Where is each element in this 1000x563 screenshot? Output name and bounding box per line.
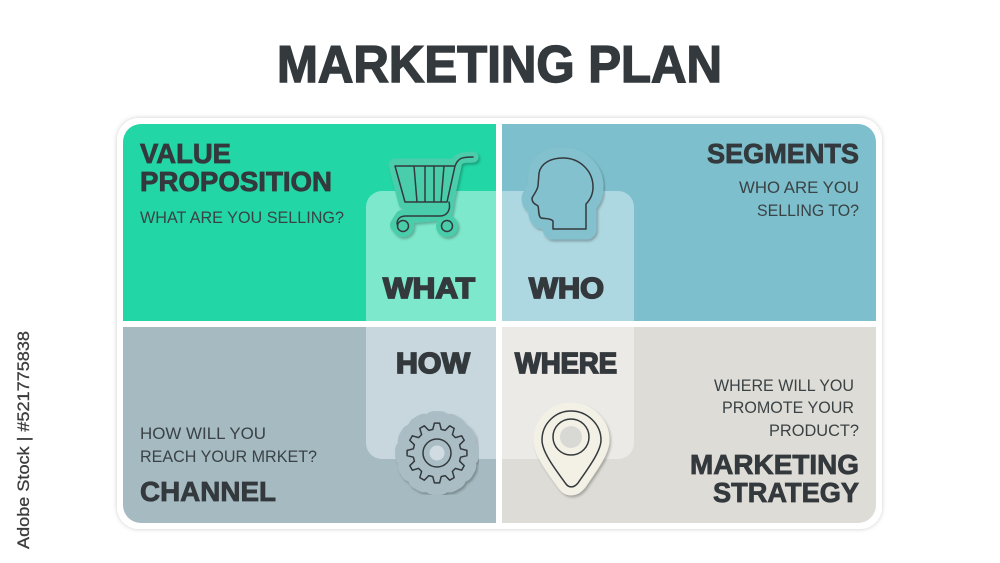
centre overlay: how: [366, 327, 496, 459]
heading: segments: SEGMENTS: [707, 138, 859, 169]
icon: gear: [407, 423, 467, 483]
label: how: HOW: [396, 348, 471, 380]
question: what are you selling: WHAT ARE YOU SELLING?: [140, 208, 344, 227]
panel: marketing strategy: [502, 327, 876, 523]
question: where will you promote your product: WHERE WILL YOU: [714, 376, 854, 395]
heading: value proposition: PROPOSITION: [140, 166, 332, 197]
heading: value proposition: VALUE: [140, 138, 231, 169]
icon: head: [532, 158, 593, 229]
panel: segments: [502, 124, 876, 321]
centre overlay: what: [366, 191, 496, 321]
heading: marketing strategy: [690, 449, 859, 508]
heading: marketing strategy: STRATEGY: [713, 477, 859, 508]
centre overlay: who: [502, 191, 634, 321]
question: who are you selling to: SELLING TO?: [757, 201, 859, 220]
panel: channel: [123, 327, 496, 523]
question: how will you reach your market: HOW WILL YOU: [140, 424, 266, 443]
question: how will you reach your market: REACH YOUR MRKET?: [140, 447, 317, 466]
question: who are you selling to: WHO ARE YOU: [739, 178, 859, 197]
question: where will you promote your product: PRODUCT?: [769, 421, 859, 440]
icon: shopping cart: [392, 157, 473, 237]
label: what: WHAT: [383, 273, 475, 305]
title: MARKETING PLAN: [277, 36, 722, 94]
question: who are you selling to: [739, 178, 859, 220]
label: who: WHO: [529, 273, 604, 305]
centre overlay: where: [502, 327, 634, 459]
heading: marketing strategy: MARKETING: [690, 449, 859, 480]
heading: value proposition: [140, 138, 332, 197]
question: how will you reach your market: [140, 424, 317, 466]
label: where: WHERE: [515, 348, 617, 380]
outer white card: [117, 118, 882, 529]
panel: value proposition: [123, 124, 496, 321]
question: where will you promote your product: PROMOTE YOUR: [722, 398, 854, 417]
icon: location pin: [542, 411, 601, 487]
question: where will you promote your product: [714, 376, 859, 440]
vertical stock credit: Adobe Stock | #521775838: [14, 331, 33, 549]
heading: channel: CHANNEL: [140, 476, 276, 507]
